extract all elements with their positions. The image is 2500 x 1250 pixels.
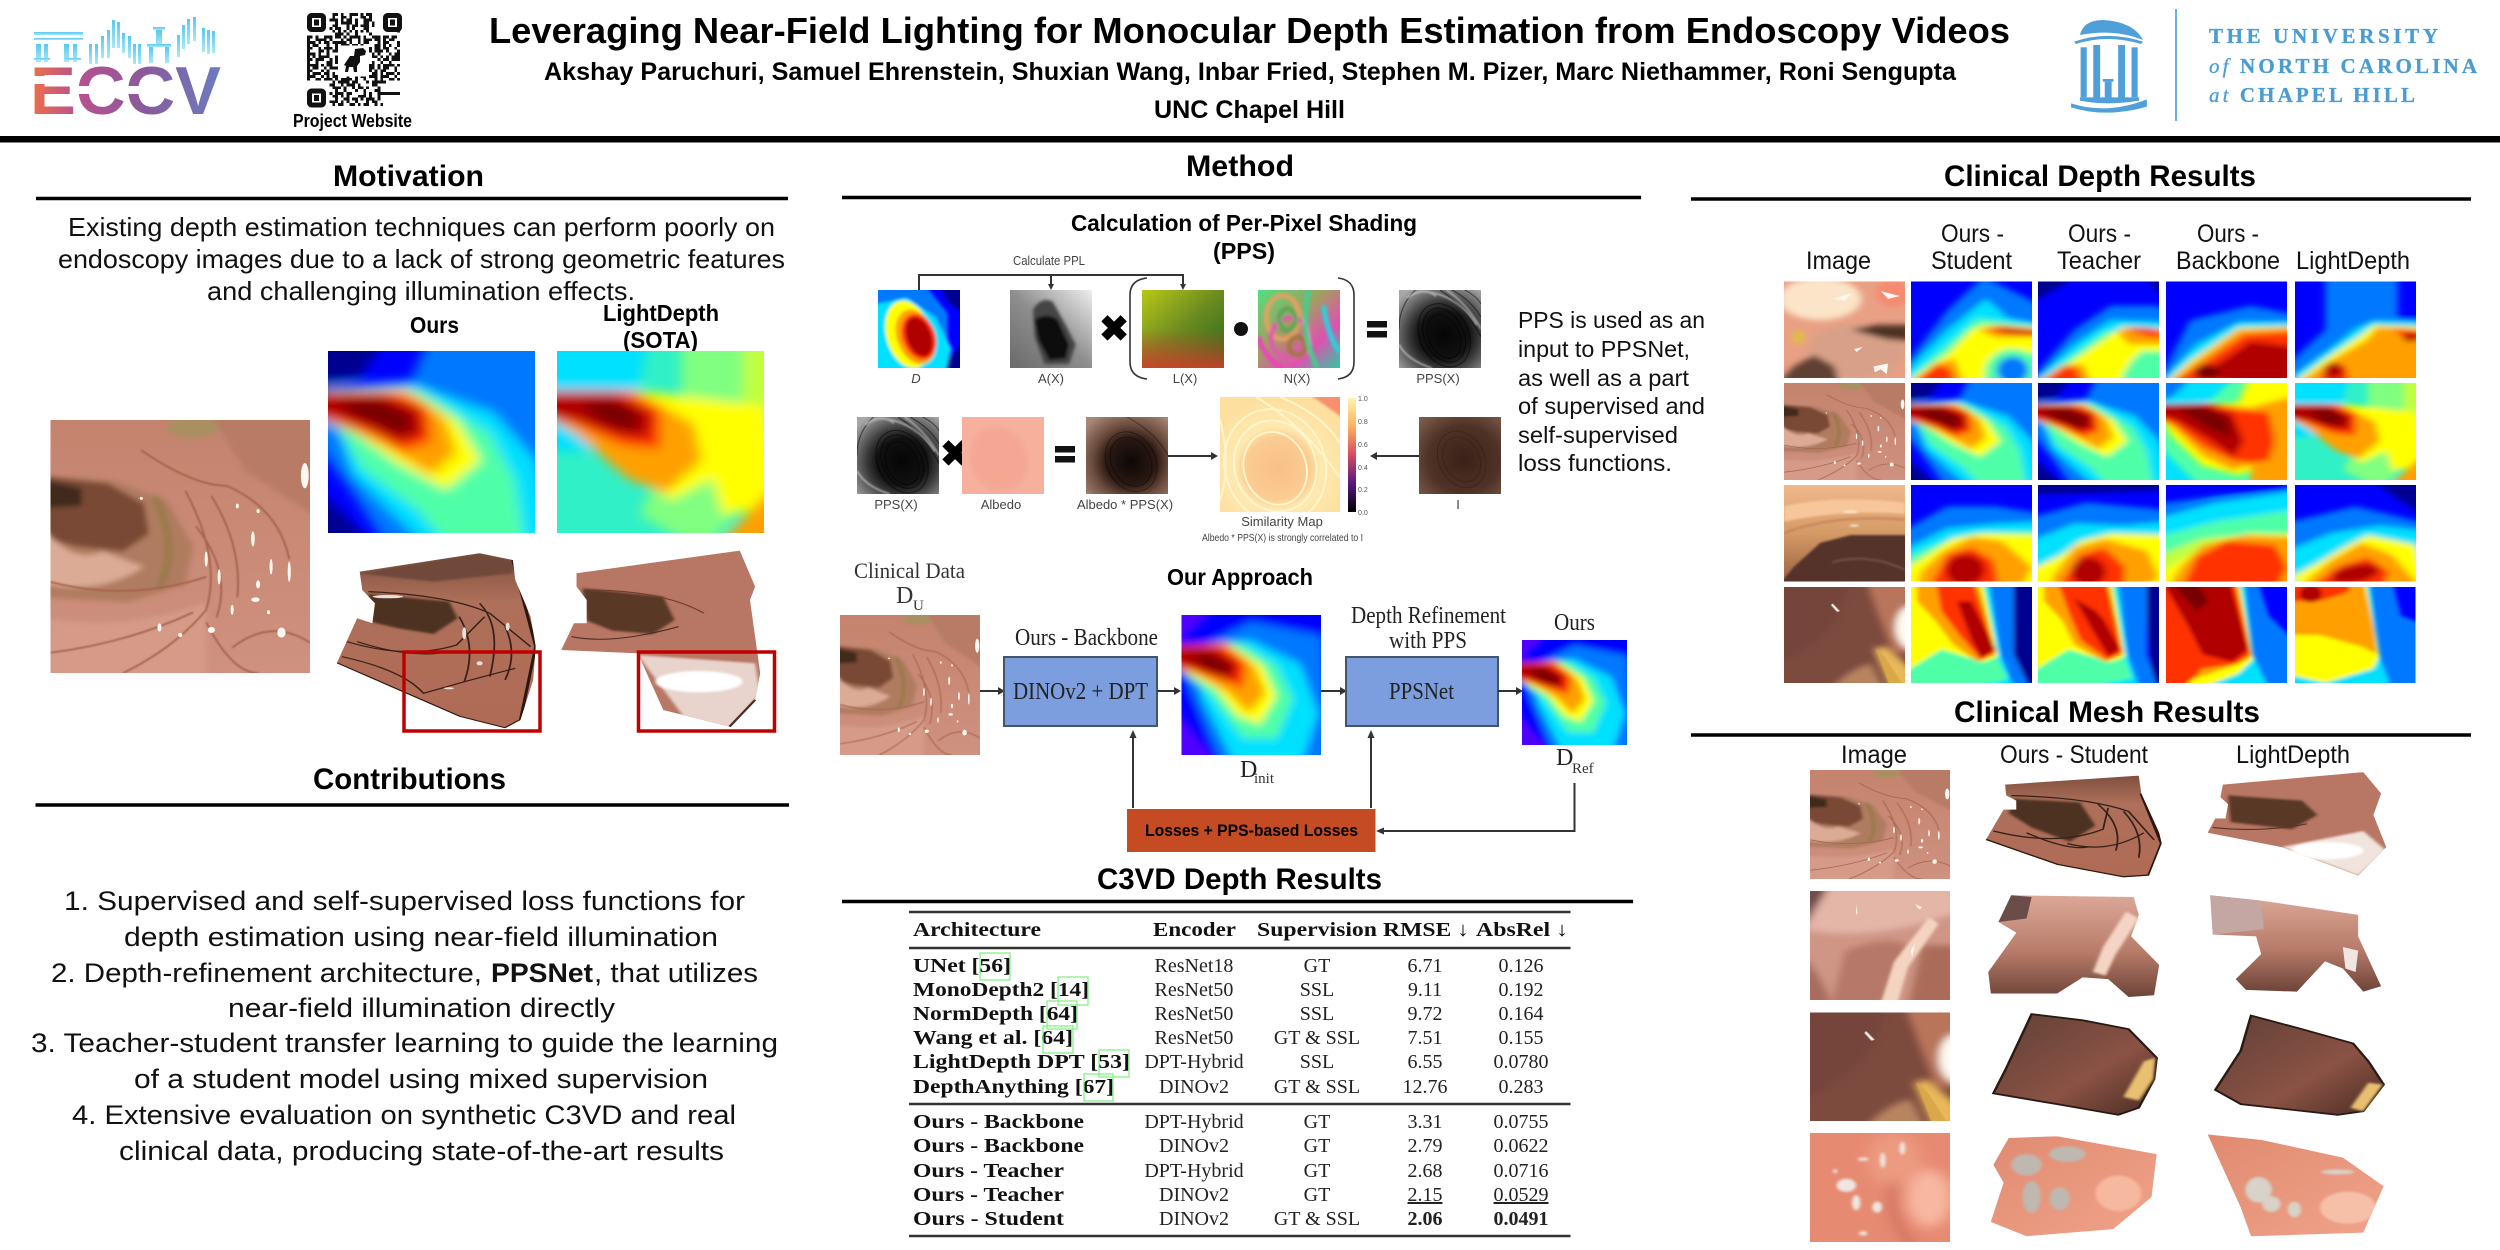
motivation text [58,212,785,306]
row 2 image [1784,383,1905,480]
label: D ref [1556,745,1594,777]
baseline rows: 6.71 [1408,955,1442,977]
row 2 backbone depth [2166,383,2287,480]
image: albedo times PPS [1086,417,1168,494]
arrow to similarity map [1168,452,1218,460]
heading: method: Method [1186,150,1294,183]
motivation text: endoscopy images due to a lack of strong geometric features [58,244,785,274]
PPSNet block: PPSNet [1389,679,1454,705]
heading: clinical depth results: Clinical Depth Results [1944,160,2256,193]
baseline rows: UNet [56] [913,955,1011,977]
panel: C3VD depth results [842,863,1633,1236]
PPS description: loss functions. [1518,450,1672,476]
row 1 LightDepth depth [2295,282,2416,378]
citation link boxes [980,953,1129,1101]
row 4 LightDepth depth [2295,587,2416,683]
our model rows: 0.0491 [1494,1208,1548,1230]
arrow [1321,687,1347,695]
panel: clinical mesh results [1691,696,2471,1247]
baseline rows: GT & SSL [1274,1076,1360,1098]
input endoscopy photo [50,420,310,673]
multiply sign: ✖ [940,433,970,474]
first row labels: PPS(X) [1416,371,1460,386]
colorbar [1348,396,1368,517]
multiply sign: ✖ [1099,308,1129,349]
our model rows: DINOv2 [1159,1208,1229,1230]
first row labels: D [911,371,921,386]
baseline rows: SSL [1300,1003,1334,1025]
colorbar: 0.4 [1358,465,1368,472]
contributions list: PPSNet [491,958,593,988]
depth map: ours [328,351,535,533]
column labels: Image [1841,741,1907,769]
baseline rows: GT [1304,955,1330,977]
our model rows: DINOv2 [1159,1184,1229,1206]
baseline rows: 9.11 [1408,979,1442,1001]
refined output depth map [1512,610,1638,756]
our model rows: 2.06 [1408,1208,1442,1230]
baseline rows: NormDepth [64] [913,1003,1078,1025]
calculate PPL connector: Calculate PPL [1013,253,1085,268]
PPS description: input to PPSNet, [1518,336,1690,362]
our model rows: GT [1304,1160,1330,1182]
column labels: Student [1931,247,2012,275]
table header row: Encoder [1153,919,1236,941]
left bracket [1130,278,1147,379]
affiliation: UNC Chapel Hill [1154,96,1345,124]
results table [909,912,1570,1236]
row 3 student depth [1911,485,2032,582]
poster title: Leveraging Near-Field Lighting for Monocular Depth Estimation from Endoscopy Videos [489,10,2010,51]
column labels: Ours - [2068,220,2131,248]
subheading: our approach: Our Approach [1167,564,1313,590]
column labels [1841,741,2350,769]
header rule [0,136,2500,142]
row 4 teacher depth [2038,587,2159,683]
row 2 LightDepth depth [2295,383,2416,480]
clinical input photo [840,615,980,755]
baseline rows: 0.192 [1498,979,1544,1001]
motivation text: Existing depth estimation techniques can perform poorly on [68,212,775,242]
backbone block: Ours - Backbone [1015,625,1158,651]
label: D ref: Ref [1572,761,1594,777]
label: clinical data: Clinical Data [854,558,965,583]
image: albedo [962,417,1044,494]
our model rows: 0.0622 [1494,1135,1548,1157]
arrow [1498,687,1523,695]
column labels: LightDepth [2236,741,2350,769]
colorbar: 0.0 [1358,510,1368,517]
row 1 image [1784,282,1905,378]
row 2 teacher depth [2038,383,2159,480]
our model rows: DPT-Hybrid [1144,1160,1244,1182]
meshes: row 1 [1981,770,2389,879]
our model rows: Ours - Student [913,1208,1064,1230]
column labels: Teacher [2057,247,2141,275]
baseline rows: 0.0780 [1494,1051,1548,1073]
contributions list: 1. Supervised and self-supervised loss functions for [64,886,745,916]
our model rows: GT [1304,1111,1330,1133]
column labels: LightDepth [2296,247,2410,275]
row 4 student depth [1911,587,2032,683]
table header row [913,919,1568,941]
baseline rows: SSL [1300,1051,1334,1073]
heading: contributions: Contributions [313,763,506,796]
backbone block: DINOv2 + DPT [1013,679,1148,705]
column labels: Ours - [2197,220,2259,248]
label: LightDepth SOTA [603,300,719,353]
image: depth D [878,290,960,368]
PPS description [1518,307,1705,476]
label: D init: D [1240,757,1257,783]
label: LightDepth SOTA: LightDepth [603,300,719,326]
baseline rows: 0.283 [1498,1076,1544,1098]
label: LightDepth SOTA: (SOTA) [623,327,698,353]
contributions list: 4. Extensive evaluation on synthetic C3VD and real [72,1100,736,1130]
label: D ref: D [1556,745,1573,771]
baseline rows: DINOv2 [1159,1076,1229,1098]
baseline rows: 9.72 [1408,1003,1442,1025]
PPS description: as well as a part [1518,365,1690,391]
UNC divider and wordmark: of NORTH CAROLINA [2209,54,2478,78]
our model rows: GT [1304,1135,1330,1157]
highlight box: LightDepth [638,652,774,731]
meshes: row 4 [1986,1133,2389,1240]
image: PPS(X) second row [857,417,939,494]
baseline rows: ResNet50 [1155,1027,1233,1049]
baseline rows: LightDepth DPT [53] [913,1051,1130,1073]
QR caption: Project Website [293,111,412,131]
row 3 backbone depth [2166,485,2287,582]
baseline rows: 0.164 [1498,1003,1544,1025]
PPSNet block: Depth Refinement [1351,603,1506,629]
subheading: per-pixel shading [1071,210,1417,264]
mesh row 1 image [1810,770,1950,879]
first row labels: L(X) [1173,371,1197,386]
mesh row 3 image [1810,1012,1950,1121]
second row labels: PPS(X) [874,497,918,512]
UNC divider and wordmark: at CHAPEL HILL [2209,83,2415,107]
baseline rows: SSL [1300,979,1334,1001]
PPSNet block: with PPS [1389,628,1467,654]
heading: C3VD results: C3VD Depth Results [1097,863,1382,896]
baseline rows [913,955,1548,1098]
UNC Old Well logo [2071,20,2147,113]
losses block: Losses + PPS-based Losses [1145,821,1358,840]
our model rows: 3.31 [1408,1111,1442,1133]
row 1 teacher depth [2038,282,2159,378]
label: D init: init [1254,771,1275,787]
mesh row 4 image [1810,1133,1950,1242]
image: N(X) [1258,290,1340,368]
calculate PPL connector [919,253,1186,290]
PPS description: PPS is used as an [1518,307,1705,333]
baseline rows: MonoDepth2 [14] [913,979,1089,1001]
depth map: D init [1182,615,1321,755]
column labels [1806,220,2410,275]
refined output depth map: Ours [1554,610,1595,636]
baseline rows: 0.155 [1498,1027,1544,1049]
row 3 image [1784,485,1905,582]
first row labels [911,371,1460,386]
PPS description: of supervised and [1518,393,1705,419]
our model rows: 0.0716 [1494,1160,1548,1182]
our model rows: GT & SSL [1274,1208,1360,1230]
column labels: Backbone [2176,247,2280,275]
our model rows: Ours - Backbone [913,1135,1084,1157]
column labels: Ours - [1941,220,2004,248]
our model rows: DINOv2 [1159,1135,1229,1157]
mesh row 2 image [1810,891,1950,1000]
subheading: per-pixel shading: Calculation of Per-Pixel Shading [1071,210,1417,236]
our model rows: Ours - Teacher [913,1160,1064,1182]
contributions list: depth estimation using near-field illumination [124,922,718,952]
row 3 teacher depth [2038,485,2159,582]
baseline rows: ResNet50 [1155,1003,1233,1025]
meshes: row 3 [1993,1014,2384,1115]
second row labels: I [1456,497,1460,512]
our model rows: Ours - Backbone [913,1111,1084,1133]
row 3 LightDepth depth [2295,485,2416,582]
baseline rows: DPT-Hybrid [1144,1051,1244,1073]
UNC divider and wordmark [2175,9,2478,121]
equals sign [1055,446,1075,462]
PPS description: self-supervised [1518,422,1678,448]
row 2 student depth [1911,383,2032,480]
contributions list: 3. Teacher-student transfer learning to guide the learning [31,1028,778,1058]
table header row: RMSE ↓ [1383,919,1469,941]
loss feedback arrows [1130,730,1574,834]
label: clinical data [854,558,965,614]
label: D init [1240,757,1275,787]
contributions list: clinical data, producing state-of-the-art results [119,1136,724,1166]
arrow [1157,687,1181,695]
table header row: Supervision [1257,919,1377,941]
contributions list: , that utilizes [594,958,758,988]
colorbar: 1.0 [1358,396,1368,403]
PPSNet block [1346,603,1506,726]
column labels: Image [1806,247,1871,275]
second row labels [874,497,1460,544]
second row labels: Albedo [981,497,1021,512]
image: L(X) [1142,290,1224,368]
first row labels: N(X) [1284,371,1310,386]
meshes: row 2 [1988,895,2381,997]
first row labels: A(X) [1038,371,1064,386]
UNC divider and wordmark: THE UNIVERSITY [2209,24,2438,48]
table header row: Architecture [913,919,1041,941]
contributions list: near-field illumination directly [228,993,616,1023]
row 1 backbone depth [2166,282,2287,378]
panel: clinical depth results [1691,160,2471,693]
right bracket [1338,278,1354,379]
losses block [1127,809,1376,852]
our model rows: GT [1304,1184,1330,1206]
mesh: ours [336,553,536,728]
our model rows [913,1111,1548,1230]
label: clinical data: U [913,598,924,614]
heading: motivation: Motivation [333,160,484,193]
arrow [980,687,1005,695]
dot product [1234,322,1248,336]
contributions list: of a student model using mixed supervision [134,1064,708,1094]
baseline rows: 0.126 [1498,955,1544,977]
authors: Akshay Paruchuri, Samuel Ehrenstein, Shuxian Wang, Inbar Fried, Stephen M. Pizer, Marc Niethammer, Roni Sengupta [544,58,1957,86]
depth map: LightDepth [557,351,764,533]
our model rows: 0.0529 [1494,1184,1548,1206]
row 4 image [1784,587,1905,683]
panel: motivation [36,160,788,733]
label: clinical data: D [896,583,913,609]
colorbar: 0.6 [1358,442,1368,449]
backbone block [1004,625,1158,726]
contributions list: 2. Depth-refinement architecture, [51,958,482,988]
arrow from I [1370,452,1419,460]
baseline rows: 12.76 [1402,1076,1448,1098]
our model rows: 2.68 [1408,1160,1442,1182]
image: A(X) [1010,290,1092,368]
ECCV conference logo [30,17,221,129]
similarity map [1220,397,1340,512]
subheading: per-pixel shading: (PPS) [1213,238,1275,264]
column labels: Ours - Student [2000,741,2148,769]
colorbar: 0.8 [1358,419,1368,426]
our model rows: 2.15 [1408,1184,1442,1206]
our model rows: 2.79 [1408,1135,1442,1157]
image: PPS(X) [1399,290,1481,368]
row 4 backbone depth [2166,587,2287,683]
baseline rows: Wang et al. [64] [913,1027,1073,1049]
mesh: LightDepth [556,547,765,733]
baseline rows: GT & SSL [1274,1027,1360,1049]
heading: clinical mesh results: Clinical Mesh Results [1954,696,2260,729]
ECCV conference logo: ECCV [30,53,221,129]
our model rows: Ours - Teacher [913,1184,1064,1206]
label: ours: Ours [410,312,459,338]
QR code to project website [307,14,400,105]
our model rows: 0.0755 [1494,1111,1548,1133]
table header row: AbsRel ↓ [1476,919,1568,941]
baseline rows: ResNet50 [1155,979,1233,1001]
panel: method [833,150,1705,852]
our model rows: DPT-Hybrid [1144,1111,1244,1133]
image: I [1419,417,1501,494]
colorbar: 0.2 [1358,487,1368,494]
baseline rows: DepthAnything [67] [913,1076,1114,1098]
equals sign [1367,321,1387,338]
second row labels: Albedo * PPS(X) [1077,497,1173,512]
baseline rows: 6.55 [1408,1051,1442,1073]
second row labels: Albedo * PPS(X) is strongly correlated to I [1202,532,1363,544]
baseline rows: 7.51 [1408,1027,1442,1049]
motivation text: and challenging illumination effects. [207,276,635,306]
highlight box: ours [404,652,540,731]
second row labels: Similarity Map [1241,514,1323,529]
panel: contributions [31,763,789,1166]
contributions list [31,886,778,1166]
row 1 student depth [1911,282,2032,378]
baseline rows: ResNet18 [1155,955,1233,977]
